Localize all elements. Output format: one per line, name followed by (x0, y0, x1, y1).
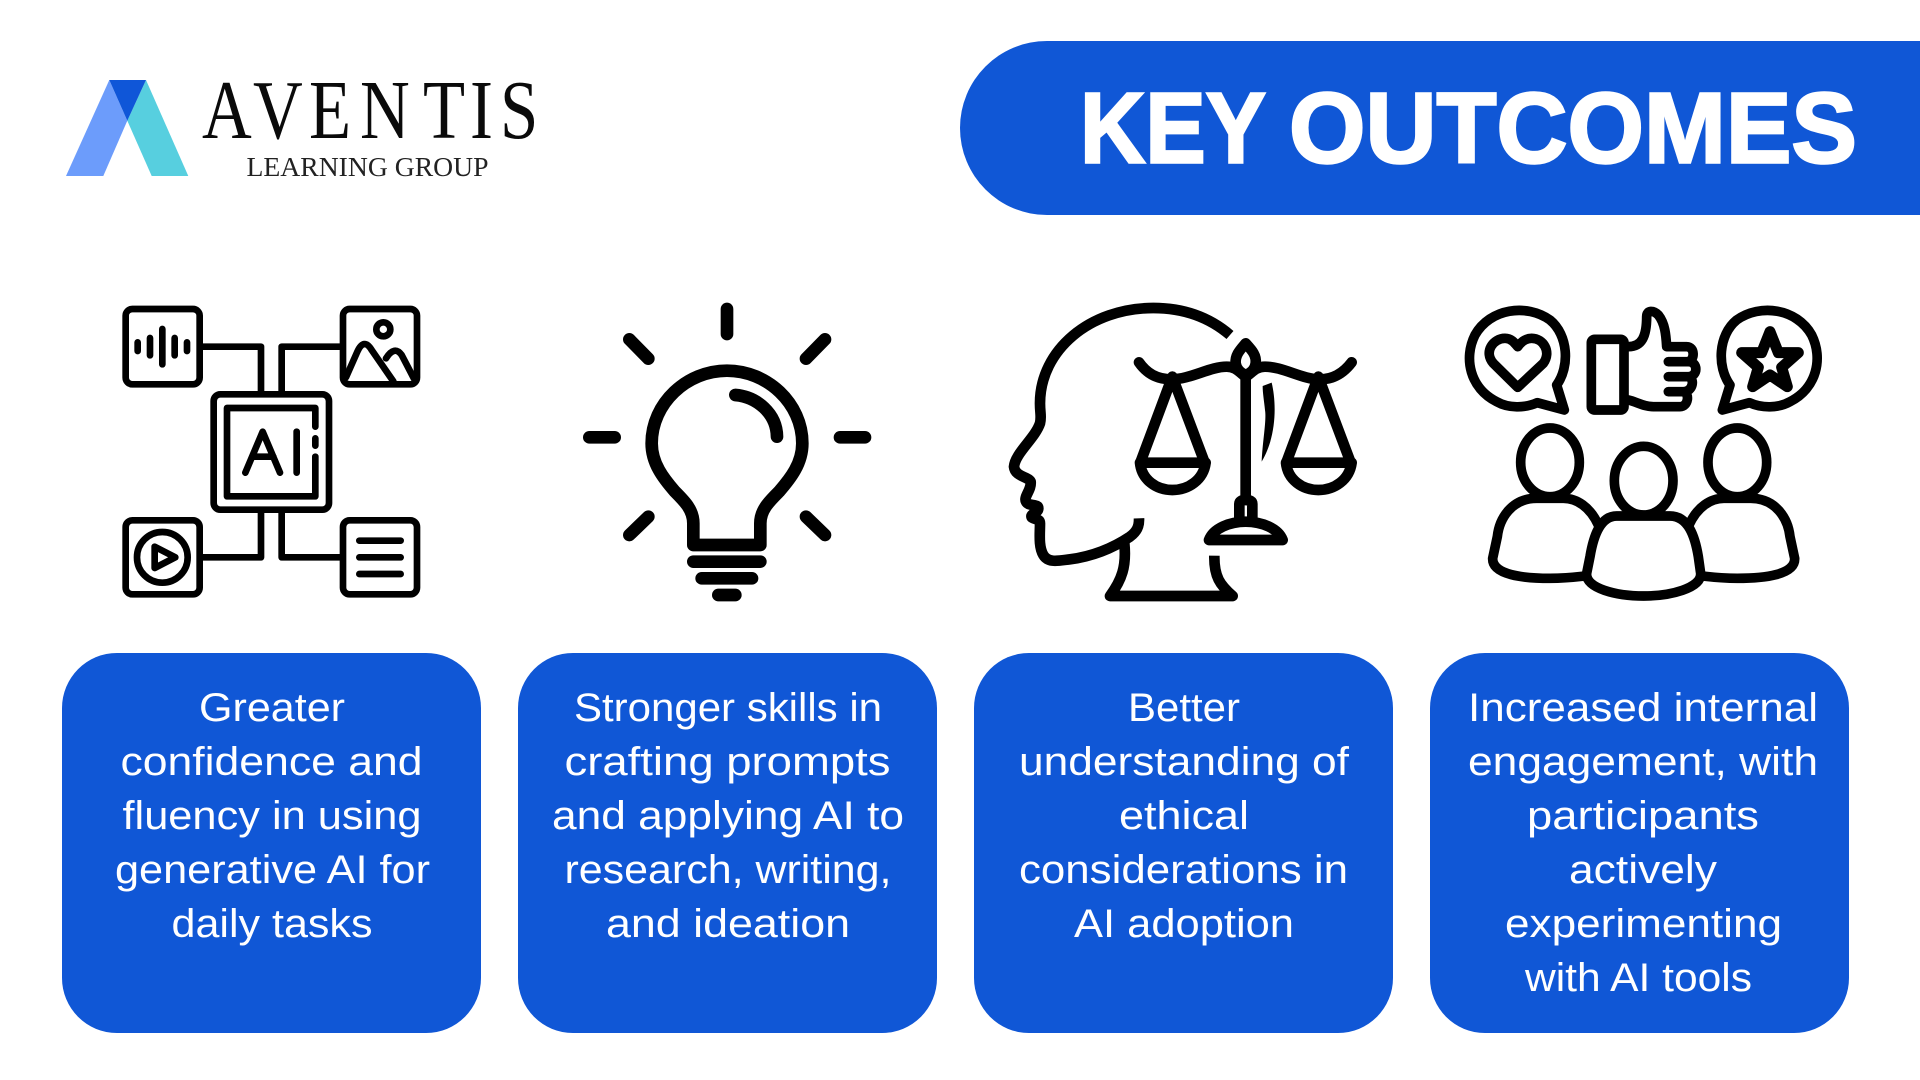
star bubble (1721, 310, 1817, 410)
card text: participants (1527, 794, 1759, 838)
light rays (589, 309, 865, 535)
panel: internal engagement (1430, 653, 1849, 1033)
bulb (652, 371, 802, 545)
card background (974, 653, 1393, 1033)
icon: AI network (126, 309, 417, 594)
left pan (1140, 377, 1206, 490)
card text: confidence and (120, 740, 422, 784)
card text: considerations in (1019, 848, 1348, 892)
head profile (1014, 308, 1230, 561)
right pan (1286, 377, 1352, 490)
card text (1468, 686, 1818, 1000)
card text (1019, 686, 1350, 946)
logo tagline: LEARNING GROUP (246, 152, 488, 182)
person left (1493, 428, 1598, 578)
neck (1110, 543, 1233, 596)
card text: experimenting (1505, 902, 1782, 946)
image box (343, 309, 417, 384)
card background (518, 653, 937, 1033)
hair highlight (1262, 383, 1275, 462)
icon: community feedback (1469, 310, 1817, 596)
card text: Better (1128, 686, 1240, 730)
panel: prompting skills (518, 653, 937, 1033)
card text: and ideation (606, 902, 850, 946)
card text: actively (1569, 848, 1717, 892)
connector lines (203, 347, 340, 557)
scale beam (1139, 362, 1352, 379)
AI chip (214, 394, 329, 510)
card text: ethical (1119, 794, 1249, 838)
scale pole and base (1209, 378, 1283, 540)
card text: AI adoption (1074, 902, 1294, 946)
card text: Stronger skills in (574, 686, 882, 730)
icon: head with scales (1014, 308, 1352, 596)
card text: engagement, with (1468, 740, 1818, 784)
title: KEY (1080, 72, 1266, 184)
logo mark (66, 80, 188, 176)
card background (62, 653, 481, 1033)
card text: research, writing, (564, 848, 892, 892)
logo: Aventis Learning Group (66, 64, 538, 182)
card background (1430, 653, 1849, 1033)
title: OUTCOMES (1289, 72, 1857, 184)
icon: light bulb (589, 309, 865, 595)
panel: ethical understanding (974, 653, 1393, 1033)
bulb highlight (735, 395, 777, 437)
card text (115, 686, 430, 946)
heart bubble (1469, 310, 1565, 410)
card text: Greater (199, 686, 345, 730)
card text: fluency in using (122, 794, 422, 838)
card text: crafting prompts (564, 740, 890, 784)
thumbs up (1591, 311, 1696, 410)
card text: generative AI for (115, 848, 430, 892)
scale finial (1236, 343, 1256, 375)
card text: with AI tools (1524, 956, 1752, 1000)
card text: Increased internal (1468, 686, 1818, 730)
video box (126, 520, 200, 594)
card text: understanding of (1019, 740, 1350, 784)
logo wordmark: AVENTIS (202, 64, 538, 157)
card text: and applying AI to (552, 794, 904, 838)
person right (1689, 428, 1795, 578)
panel: confidence and fluency (62, 653, 481, 1033)
person center (1587, 446, 1701, 596)
audio box (126, 309, 200, 384)
banner background (960, 41, 1920, 215)
bulb base (693, 562, 760, 595)
title banner (960, 41, 1920, 215)
card text: daily tasks (172, 902, 372, 946)
card text (552, 686, 904, 946)
document box (343, 520, 417, 594)
